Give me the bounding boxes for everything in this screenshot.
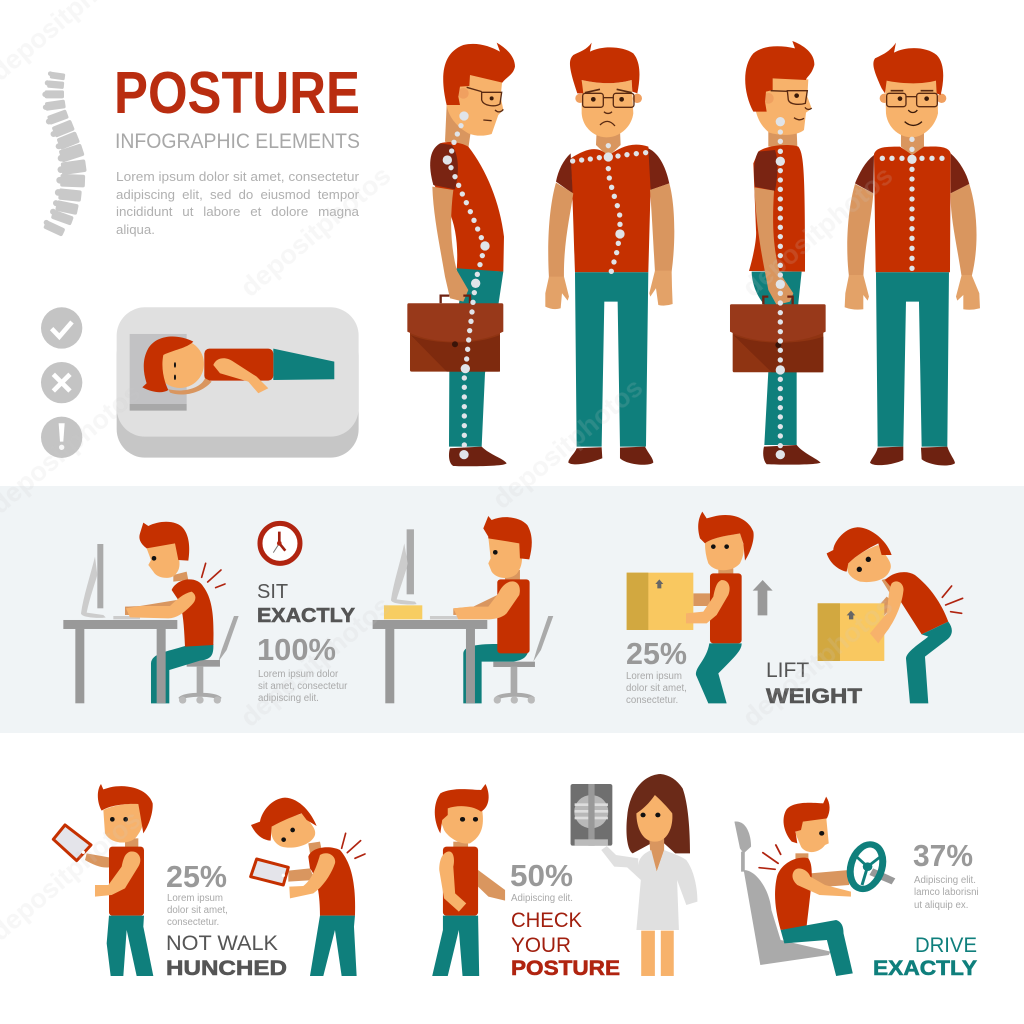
label: check your posture: CHECK [511,909,582,932]
label: not walk hunched: dolor sit amet, [167,905,228,916]
label: lift weight: consectetur. [626,695,678,706]
label: check your posture: YOUR [511,934,571,957]
label: lift weight: 25% [626,636,687,671]
label: sit exactly: SIT [257,581,288,603]
label: not walk hunched [166,859,287,980]
label: drive exactly: lamco laborisni [914,887,979,898]
intro text: aliqua. [116,222,155,237]
title: POSTURE [114,60,360,126]
label: drive exactly: 37% [913,838,973,873]
panel: sit and lift band [0,486,1024,733]
watermark: depositphotos [737,590,898,733]
label: not walk hunched: Lorem ipsum [167,893,223,904]
figure: good posture side view [730,41,826,465]
label: sit exactly: sit amet, consectetur [258,681,348,692]
intro text: adipiscing elit, sed do eiusmod tempor [116,187,360,202]
figure: good posture front view [845,43,980,466]
label: drive exactly: DRIVE [915,934,977,957]
label: sit exactly [257,581,356,704]
intro text: Lorem ipsum dolor sit amet, consectetur [116,169,360,184]
desk scene: bad sitting [63,522,239,704]
intro text: incididunt ut labore et dolore magna [116,204,360,219]
phone scene: hunched walking [251,798,365,976]
figure: bad posture front view [545,43,674,465]
label: drive exactly: EXACTLY [873,957,977,980]
watermark: depositphotos [235,160,396,303]
drive scene [734,797,895,976]
watermark: depositphotos [487,372,648,515]
label: check your posture [510,858,620,980]
phone scene: good walking [53,784,153,976]
icon: clock [260,523,300,563]
mattress with sleeping man [117,307,359,458]
label: sit exactly: adipiscing elit. [258,693,319,704]
label: lift weight: WEIGHT [766,685,862,708]
label: not walk hunched: HUNCHED [166,957,287,980]
label: lift weight: LIFT [766,659,809,682]
label: check your posture: Adipiscing elit. [511,893,573,904]
figure: bad posture side view [407,43,515,466]
label: not walk hunched: NOT WALK [166,932,278,955]
check scene: man [432,784,505,976]
label: check your posture: POSTURE [511,957,620,980]
intro text [116,169,360,237]
icon: up arrow [753,580,773,615]
label: lift weight: dolor sit amet, [626,683,687,694]
label: sit exactly: EXACTLY [257,605,356,627]
icon: status circles [41,307,82,458]
label: lift weight: Lorem ipsum [626,671,682,682]
label: check your posture: 50% [510,858,573,893]
lift scene: bad lifting [818,527,963,703]
watermark: depositphotos [235,590,396,733]
label: drive exactly [873,838,979,980]
icon: spine [41,71,87,237]
label: not walk hunched: consectetur. [167,917,219,928]
subtitle: INFOGRAPHIC ELEMENTS [115,129,360,153]
lift scene: good lifting [627,512,754,703]
watermark: depositphotos [737,160,898,303]
label: not walk hunched: 25% [166,859,227,894]
label: sit exactly: 100% [257,632,336,667]
label: lift weight [626,636,862,708]
desk scene: good sitting [373,516,553,704]
label: drive exactly: Adipiscing elit. [914,875,976,886]
check scene: doctor with x-ray [571,774,697,976]
label: drive exactly: ut aliquip ex. [914,900,968,911]
label: sit exactly: Lorem ipsum dolor [258,669,339,680]
